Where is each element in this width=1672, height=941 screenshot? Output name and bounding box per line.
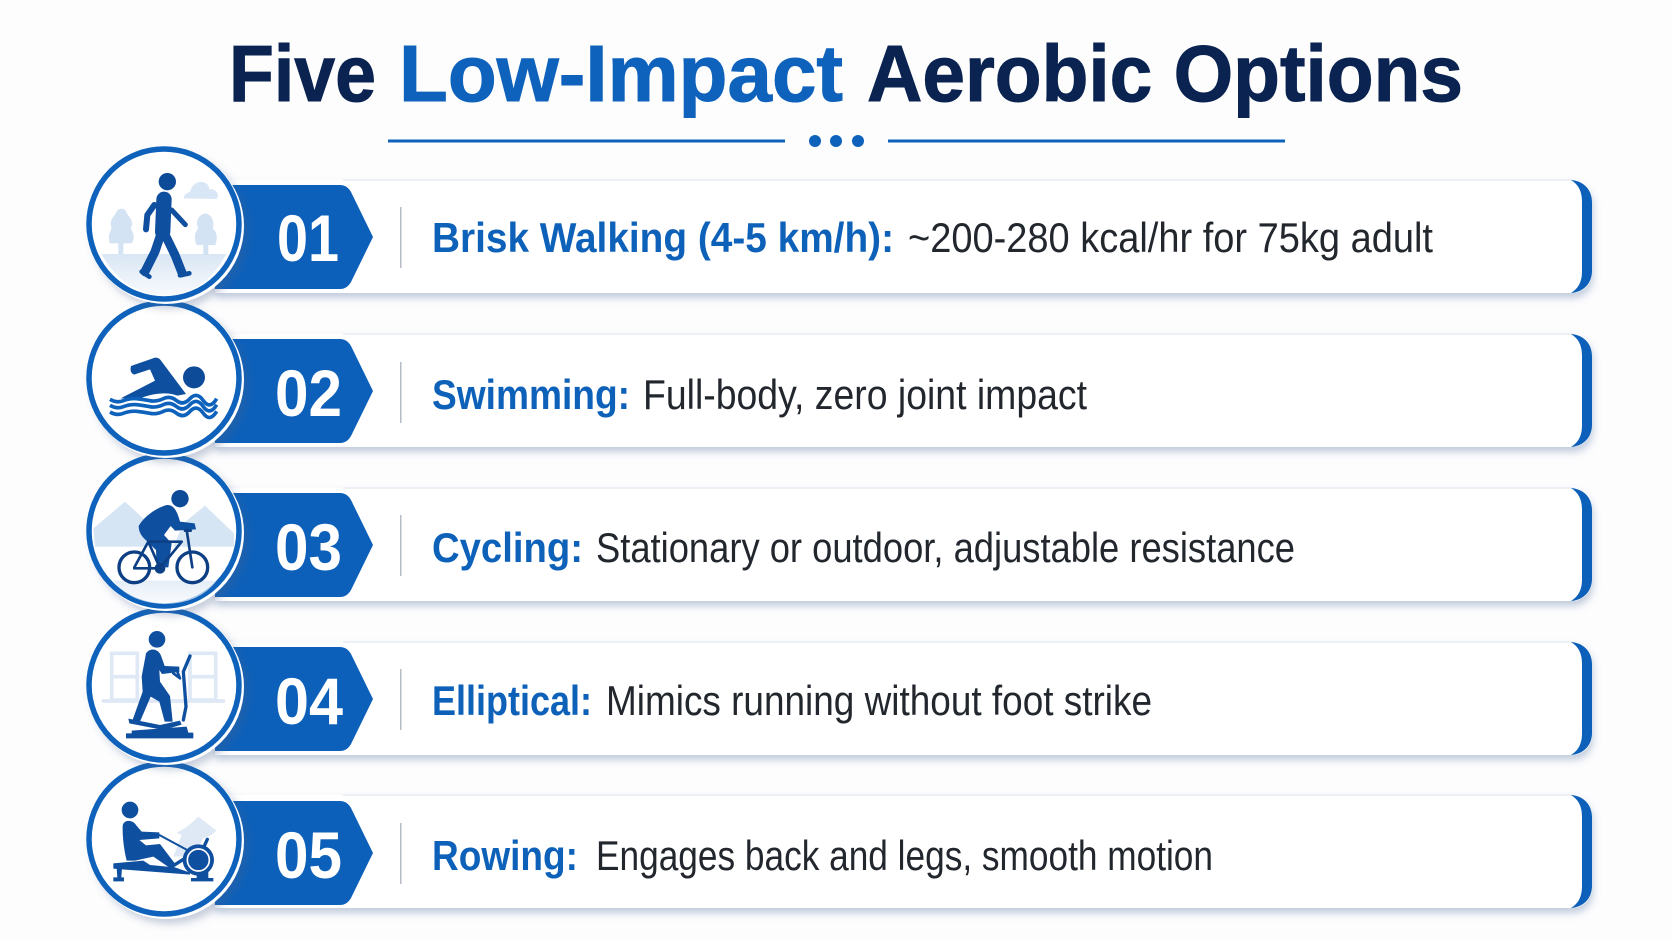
separator: [400, 515, 402, 576]
text 1: ~200-280 kcal/hr for 75kg adult: [908, 214, 1433, 261]
number badge 04: [215, 647, 373, 751]
card 2: [215, 334, 1592, 447]
number badge 01: 01: [277, 201, 339, 275]
text 3: Stationary or outdoor, adjustable resistance: [596, 524, 1295, 571]
separator: [400, 207, 402, 268]
number badge 03: [215, 493, 373, 597]
icon circle 3: cycling: [88, 455, 244, 611]
number badge 02: 02: [275, 356, 342, 430]
separator: [400, 362, 402, 423]
card 5: [215, 795, 1592, 908]
title divider with dots: [388, 135, 1285, 147]
text 2: [432, 371, 1087, 418]
text 4: [432, 677, 1152, 724]
card 4: [215, 642, 1592, 755]
title: Five: [229, 29, 376, 118]
icon circle 1: walking: [88, 148, 244, 304]
separator: [400, 823, 402, 884]
text 3: Cycling:: [432, 524, 583, 571]
number badge 02: [215, 339, 373, 443]
number badge 01: [215, 185, 373, 289]
icon circle 4: elliptical: [88, 609, 244, 765]
row 3: cycling: [215, 488, 1592, 601]
text 5: Engages back and legs, smooth motion: [596, 832, 1213, 879]
text 1: Brisk Walking (4-5 km/h):: [432, 214, 894, 261]
row 4: elliptical: [215, 642, 1592, 755]
number badge 05: 05: [275, 818, 342, 892]
title: Low-Impact: [399, 29, 843, 118]
card 1: [215, 180, 1592, 293]
number badge 03: 03: [275, 510, 342, 584]
row 5: rowing: [215, 795, 1592, 908]
title: [229, 29, 1463, 118]
text 4: Elliptical:: [432, 677, 592, 724]
title: Aerobic Options: [867, 29, 1463, 118]
number badge 05: [215, 801, 373, 905]
icon circle 5: rowing: [88, 763, 244, 919]
text 2: Swimming:: [432, 371, 630, 418]
text 5: Rowing:: [432, 832, 578, 879]
number badge 04: 04: [275, 664, 343, 738]
icon circle 2: swimming: [88, 302, 244, 458]
card 3: [215, 488, 1592, 601]
separator: [400, 669, 402, 730]
text 4: Mimics running without foot strike: [606, 677, 1152, 724]
text 2: Full-body, zero joint impact: [643, 371, 1087, 418]
row 2: swimming: [215, 334, 1592, 447]
text 5: [432, 832, 1213, 879]
row 1: brisk walking: [215, 180, 1592, 293]
text 1: [432, 214, 1433, 261]
